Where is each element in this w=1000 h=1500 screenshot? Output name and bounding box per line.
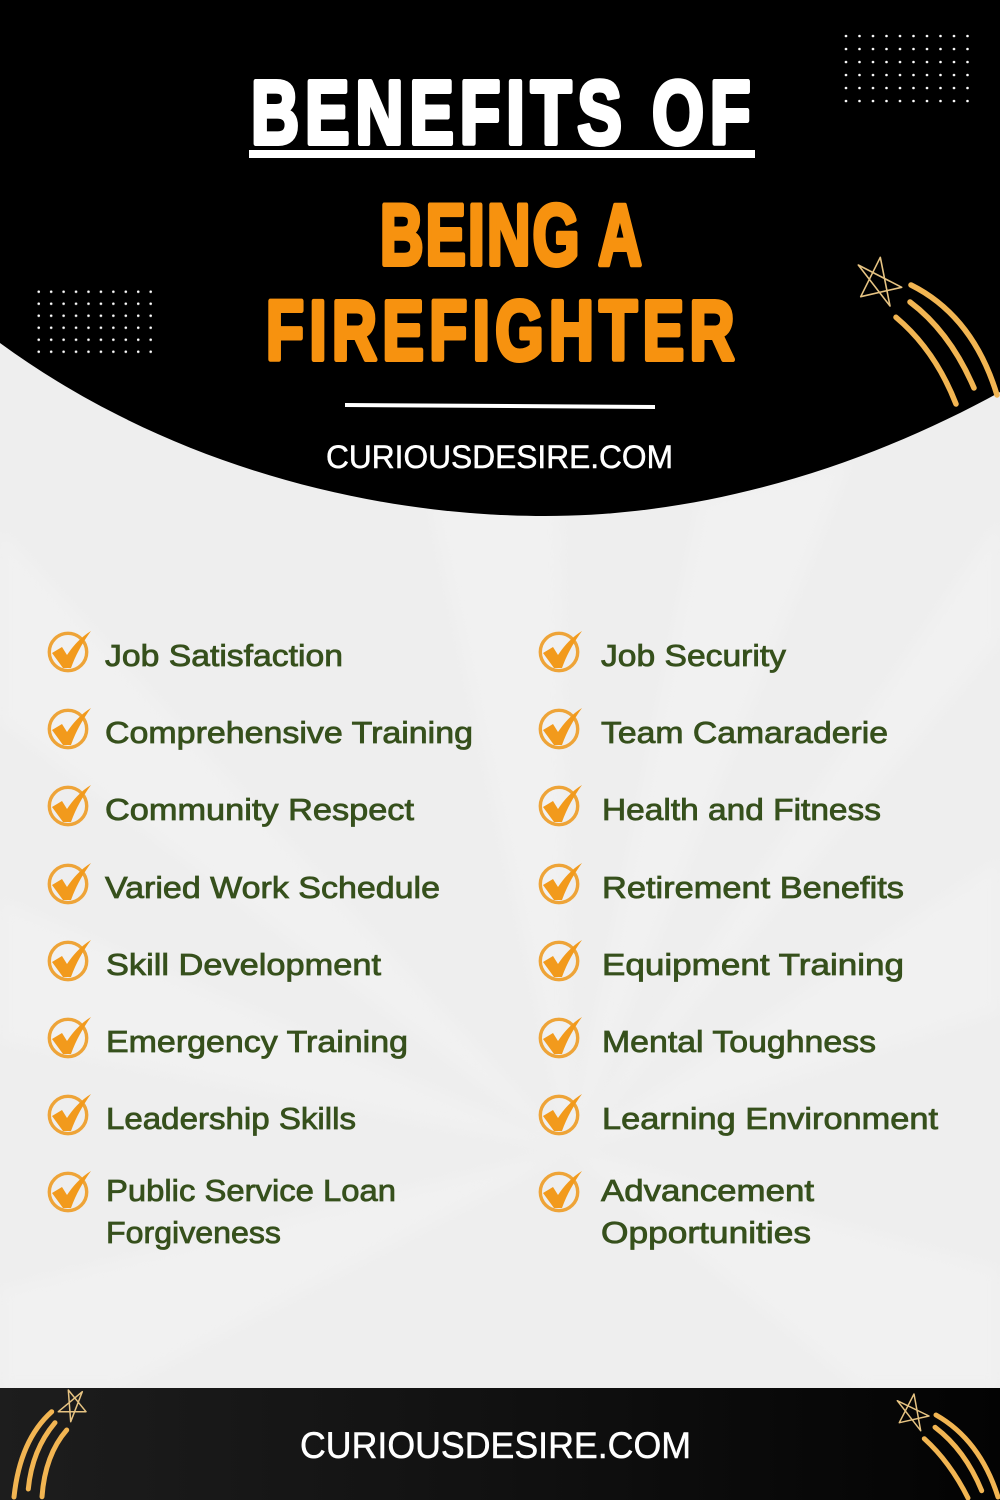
item: job satisfaction [49, 631, 343, 673]
icon: shooting star footer left [14, 1390, 86, 1497]
item: emergency training [49, 1017, 408, 1059]
item: equipment training: Equipment Training [602, 948, 904, 982]
heading underline [249, 150, 755, 158]
item: health and fitness: Health and Fitness [602, 793, 881, 827]
item: learning environment: Learning Environment [602, 1102, 939, 1136]
item: team camaraderie [540, 708, 888, 750]
item: varied work schedule [49, 863, 440, 905]
item: public service loan forgiveness: Forgiveness [106, 1216, 281, 1250]
item: job satisfaction: Job Satisfaction [105, 639, 343, 673]
item: equipment training [540, 940, 904, 982]
panel: left benefits list [49, 631, 473, 1250]
item: comprehensive training [49, 708, 473, 750]
icon: shooting star top right [858, 257, 997, 404]
item: emergency training: Emergency Training [106, 1025, 408, 1059]
item: team camaraderie: Team Camaraderie [601, 716, 888, 750]
item: mental toughness: Mental Toughness [602, 1025, 876, 1059]
item: leadership skills [49, 1094, 356, 1136]
item: advancement opportunities: Advancement [601, 1174, 815, 1208]
header: black curved panel [0, 0, 1000, 516]
item: job security: Job Security [601, 639, 787, 673]
dot grid left [32, 286, 157, 358]
dot grid top right [839, 30, 974, 108]
item: advancement opportunities [540, 1171, 815, 1250]
panel: right benefits list [540, 631, 939, 1250]
footer website: CURIOUSDESIRE.COM [300, 1425, 691, 1466]
title [249, 62, 755, 378]
item: varied work schedule: Varied Work Schedule [105, 871, 440, 905]
item: community respect [49, 785, 415, 827]
item: public service loan forgiveness [49, 1171, 396, 1250]
item: public service loan forgiveness: Public Service Loan [106, 1174, 396, 1208]
header rule [345, 405, 655, 407]
item: community respect: Community Respect [105, 793, 415, 827]
item: comprehensive training: Comprehensive Training [105, 716, 473, 750]
item: advancement opportunities: Opportunities [601, 1216, 811, 1250]
item: health and fitness [540, 785, 881, 827]
header website: CURIOUSDESIRE.COM [326, 439, 673, 475]
item: job security [540, 631, 787, 673]
item: learning environment [540, 1094, 939, 1136]
heading: being a: BEING A [380, 187, 642, 283]
item: mental toughness [540, 1017, 876, 1059]
heading: firefighter: FIREFIGHTER [266, 283, 734, 378]
item: retirement benefits [540, 863, 904, 905]
heading: benefits of: BENEFITS OF [251, 62, 751, 163]
item: leadership skills: Leadership Skills [106, 1102, 356, 1136]
item: skill development: Skill Development [106, 948, 382, 982]
footer bar [0, 1388, 1000, 1500]
item: skill development [49, 940, 382, 982]
item: retirement benefits: Retirement Benefits [602, 871, 904, 905]
icon: shooting star footer right [897, 1394, 998, 1498]
